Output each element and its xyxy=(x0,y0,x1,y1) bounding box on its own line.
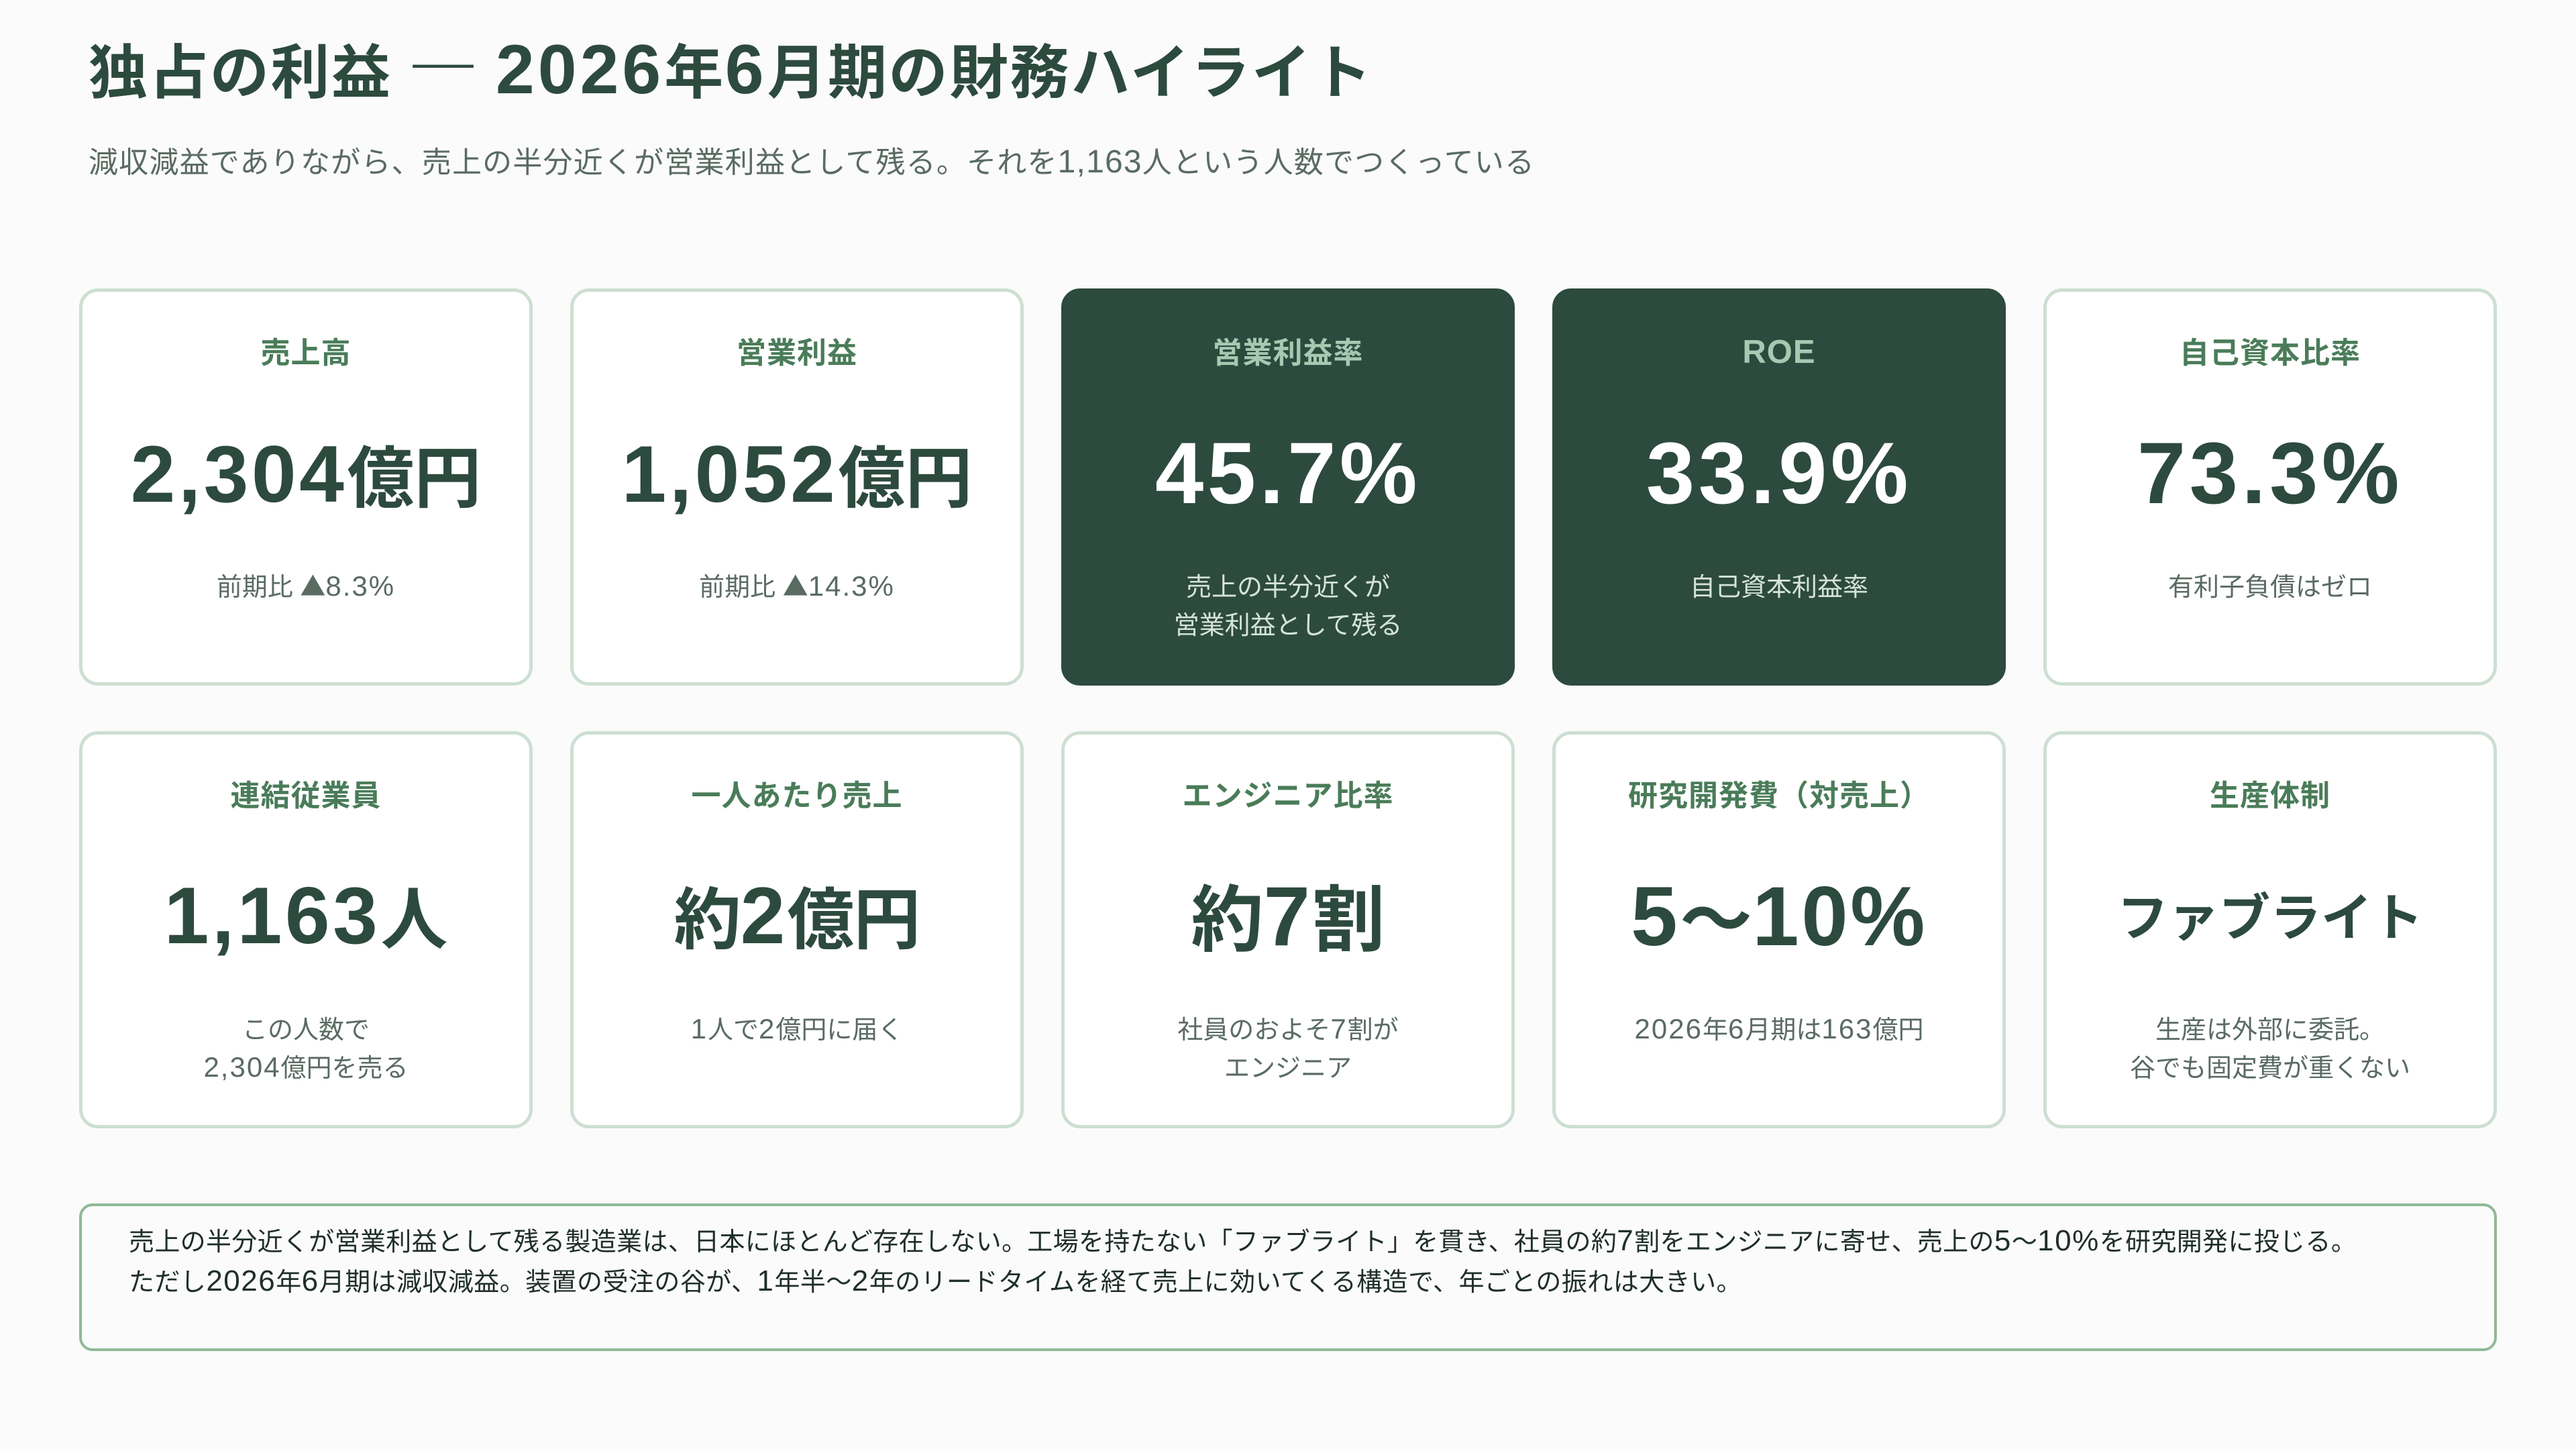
note: 売上の半分近くが xyxy=(1186,574,1390,602)
value: 73.3% xyxy=(2137,424,2403,522)
note: 社員のおよそ7割が xyxy=(1177,1013,1399,1044)
label: 連結従業員 xyxy=(231,780,381,812)
label: 売上高 xyxy=(260,337,352,370)
note xyxy=(203,1016,409,1083)
value: 約2億円 xyxy=(674,871,920,961)
note xyxy=(1174,574,1402,640)
note: 1人で2億円に届く xyxy=(691,1013,903,1044)
value: 2,304億円 xyxy=(131,429,481,519)
panel: 営業利益率 xyxy=(1061,288,1515,686)
note: この人数で xyxy=(242,1016,370,1044)
summary text xyxy=(129,1224,2357,1297)
label: 生産体制 xyxy=(2210,780,2330,812)
label: 営業利益率 xyxy=(1213,337,1363,370)
value: 33.9% xyxy=(1646,424,1912,522)
value: 1,163人 xyxy=(164,871,447,961)
note: エンジニア xyxy=(1224,1055,1352,1083)
panel: 一人あたり売上 xyxy=(570,731,1024,1128)
note: 生産は外部に委託。 xyxy=(2155,1016,2385,1044)
subtitle: 減収減益でありながら、売上の半分近くが営業利益として残る。それを1,163人という人数でつくっている xyxy=(89,144,1535,180)
note: 2,304億円を売る xyxy=(203,1051,409,1083)
label: 営業利益 xyxy=(737,337,857,370)
title: 独占の利益 — 2026年6月期の財務ハイライト xyxy=(89,11,1373,114)
label: 研究開発費（対売上） xyxy=(1628,780,1930,812)
panel: 売上高 xyxy=(79,288,533,686)
value: 45.7% xyxy=(1155,424,1421,522)
value: 約7割 xyxy=(1191,870,1385,963)
note: 営業利益として残る xyxy=(1174,612,1402,640)
panel: 研究開発費 xyxy=(1552,731,2006,1128)
note: 有利子負債はゼロ xyxy=(2168,574,2372,602)
note: 谷でも固定費が重くない xyxy=(2130,1055,2410,1083)
panel: 連結従業員 xyxy=(79,731,533,1128)
note: 自己資本利益率 xyxy=(1690,574,1868,602)
panel: 営業利益 xyxy=(570,288,1024,686)
panel: エンジニア比率 xyxy=(1061,731,1515,1128)
value: 1,052億円 xyxy=(622,429,972,519)
panel: 生産体制 xyxy=(2043,731,2497,1128)
label: 自己資本比率 xyxy=(2180,337,2361,370)
note xyxy=(2130,1016,2410,1083)
label: エンジニア比率 xyxy=(1182,780,1394,812)
value: ファブライト xyxy=(2117,890,2423,947)
note: 前期比 ▲14.3% xyxy=(699,566,895,603)
panel: summary xyxy=(79,1203,2497,1351)
note: 2026年6月期は163億円 xyxy=(1635,1013,1923,1044)
label: 一人あたり売上 xyxy=(691,780,903,812)
note: 前期比 ▲8.3% xyxy=(217,566,395,603)
value: 5〜10% xyxy=(1631,870,1927,963)
summary text: ただし2026年6月期は減収減益。装置の受注の谷が、1年半〜2年のリードタイムを経て売上に効いてくる構造で、年ごとの振れは大きい。 xyxy=(129,1265,1742,1297)
panel: 自己資本比率 xyxy=(2043,288,2497,686)
panel: ROE xyxy=(1552,288,2006,686)
label: ROE xyxy=(1742,334,1816,370)
summary text: 売上の半分近くが営業利益として残る製造業は、日本にほとんど存在しない。工場を持たない「ファブライト」を貫き、社員の約7割をエンジニアに寄せ、売上の5〜10%を研究開発に投じる。 xyxy=(129,1224,2357,1257)
note xyxy=(1177,1013,1399,1083)
